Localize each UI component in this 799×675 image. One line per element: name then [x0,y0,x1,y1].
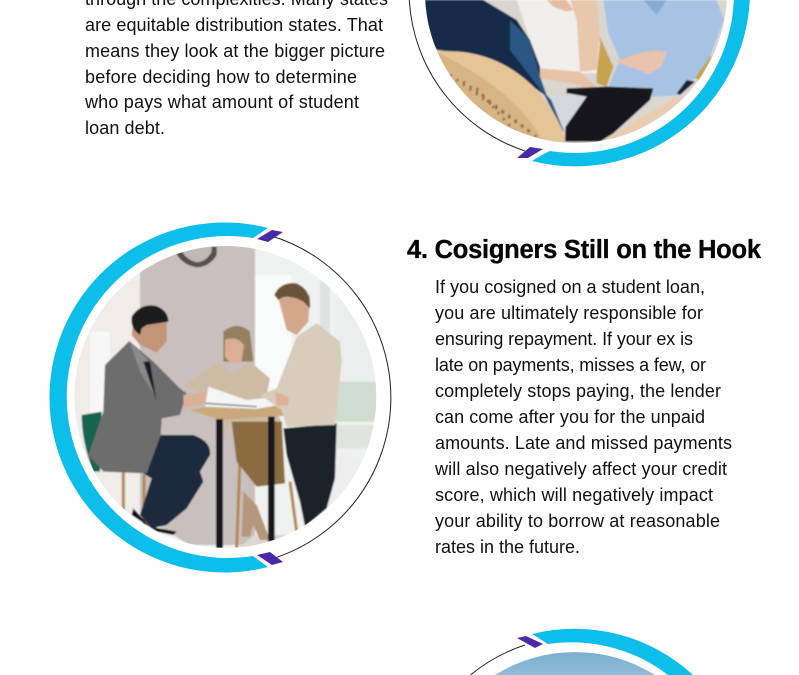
text block: cosigner responsibility: amounts. Late and missed payments [435,433,732,453]
ring: cyan crescent [49,222,268,572]
stool left [82,412,102,472]
text block: cosigner responsibility: will also negatively affect your credit [434,459,727,479]
panel: bottom circular photo [470,629,693,675]
ring: cyan crescent [532,0,750,166]
ring: cyan crescent [532,629,693,675]
text block: equitable distribution states: means they look at the bigger picture [85,41,385,61]
marker: purple tab [517,636,543,648]
text block: cosigner responsibility: score, which will negatively impact [435,485,713,505]
photo: sky-blue image top [495,652,655,675]
panel: middle circular photo [49,222,391,572]
ring: thin outline arc [409,0,525,151]
text block: cosigner responsibility: late on payments, misses a few, or [435,355,706,375]
heading: section 4: 4. Cosigners Still on the Hook [407,236,762,264]
text block: equitable distribution states: loan debt. [85,118,165,138]
man left [140,435,210,528]
text block: cosigner responsibility: If you cosigned on a student loan, [435,277,705,297]
marker: purple tab bottom [257,552,283,565]
papers [205,387,278,409]
text block: cosigner responsibility [434,277,732,557]
text block: cosigner responsibility: your ability to borrow at reasonable [435,511,720,531]
ring: thin outline arc [470,645,525,675]
table [190,406,298,420]
marker: purple tab [517,147,543,158]
text block: cosigner responsibility: rates in the future. [435,537,580,557]
text block: equitable distribution states [84,0,388,138]
text block: equitable distribution states: are equitable distribution states. That [85,15,383,35]
marker: purple tab top [257,230,283,242]
panel: top circular photo [409,0,750,166]
man right [283,423,337,527]
photo: three people at a high table [73,245,377,549]
woman [223,326,253,362]
photo: couple meeting around a table [420,0,733,147]
text block: cosigner responsibility: completely stops paying, the lender [435,381,721,401]
text block: cosigner responsibility: you are ultimately responsible for [435,303,703,323]
text block: equitable distribution states: before deciding how to determine [85,67,357,87]
ring: thin outline arc [270,236,391,560]
text block: cosigner responsibility: ensuring repayment. If your ex is [435,329,693,349]
text block: equitable distribution states: who pays what amount of student [84,92,359,112]
text block: cosigner responsibility: can come after you for the unpaid [435,407,705,427]
